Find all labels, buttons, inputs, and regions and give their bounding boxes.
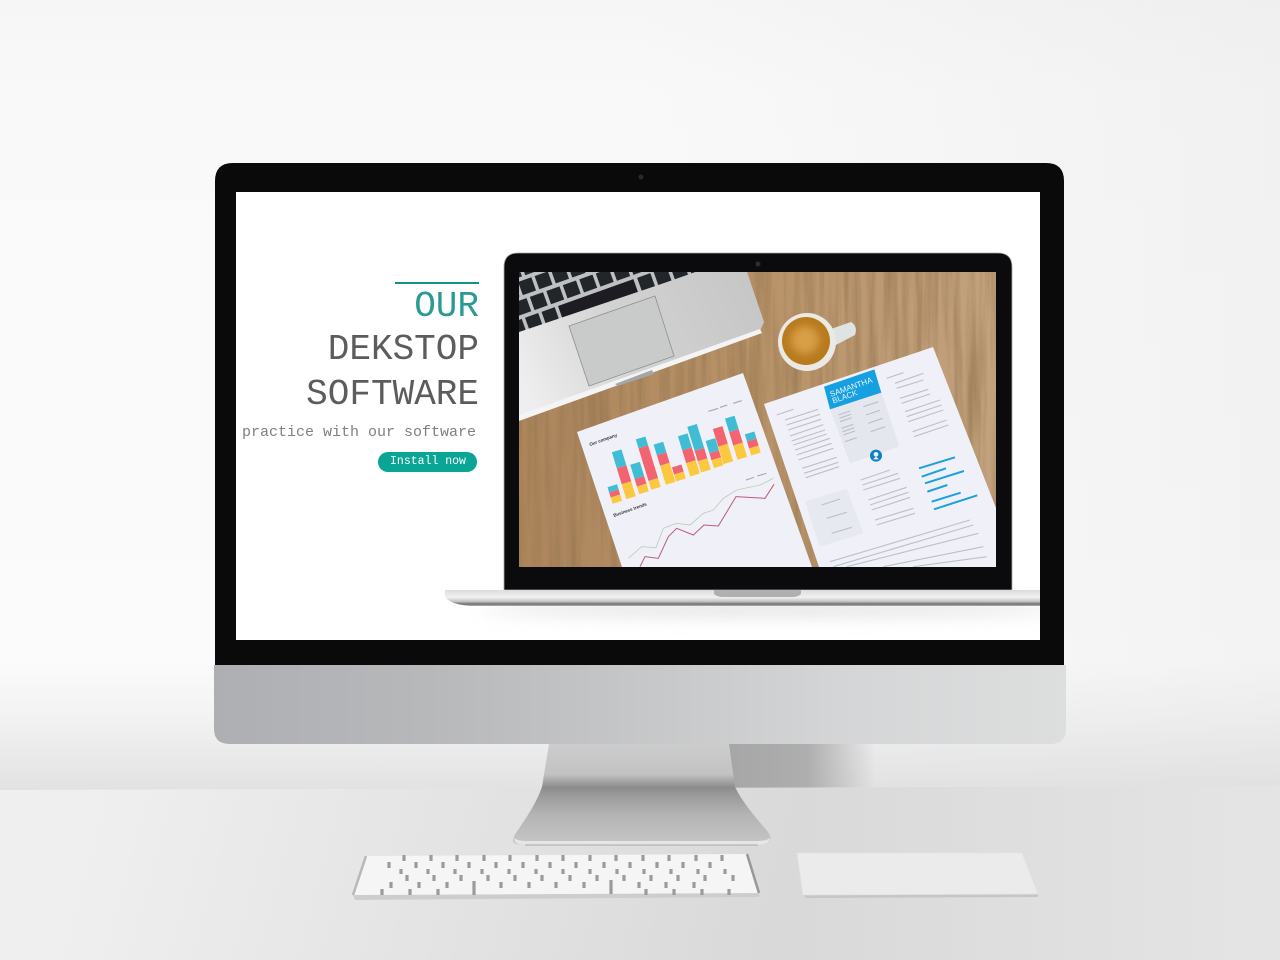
- install button: [378, 452, 477, 472]
- laptop shadow: [480, 603, 1060, 617]
- monitor body bezel: [215, 163, 1064, 665]
- resume name: SAMANTHA: [829, 375, 874, 399]
- resume panels: [830, 393, 899, 463]
- photo laptop: [519, 272, 764, 421]
- monitor stand: [513, 744, 771, 845]
- keyboard: [353, 854, 759, 900]
- monitor: [214, 163, 1066, 744]
- subtitle: practice with our software: [242, 424, 476, 441]
- chart paper: Business trends: [613, 501, 648, 518]
- teal heading rule: [395, 282, 479, 284]
- stacked bar chart: [607, 401, 767, 504]
- trackpad: [797, 853, 1038, 898]
- resume paper: [764, 347, 996, 567]
- monitor chin: [214, 665, 1066, 744]
- resume text lines: [777, 373, 987, 567]
- resume skill bars: [919, 457, 977, 509]
- photo trackpad: [569, 296, 674, 386]
- slide content: [243, 252, 1040, 622]
- monitor camera: [638, 174, 644, 180]
- laptop lid: [504, 253, 1012, 590]
- monitor screen: [236, 192, 1040, 640]
- install button: Install now: [390, 455, 466, 468]
- chart legend: [708, 401, 742, 411]
- laptop base: [445, 590, 1040, 606]
- laptop camera: [756, 262, 760, 266]
- photo keyboard: [519, 272, 696, 332]
- title: OUR: [414, 286, 479, 327]
- laptop: [445, 252, 1040, 606]
- photo coffee cup: [778, 313, 856, 371]
- title: SOFTWARE: [306, 374, 479, 415]
- laptop photo: [519, 272, 996, 567]
- title: [308, 292, 478, 404]
- chart titles: Our company: [589, 432, 618, 447]
- title: DEKSTOP: [328, 329, 479, 370]
- line chart: [628, 478, 774, 567]
- chart paper: [577, 373, 812, 567]
- keyboard key gaps: [382, 855, 733, 895]
- resume name: BLACK: [831, 388, 859, 405]
- resume header: [824, 369, 881, 409]
- resume avatar: [870, 450, 882, 462]
- wood desk: [519, 272, 996, 567]
